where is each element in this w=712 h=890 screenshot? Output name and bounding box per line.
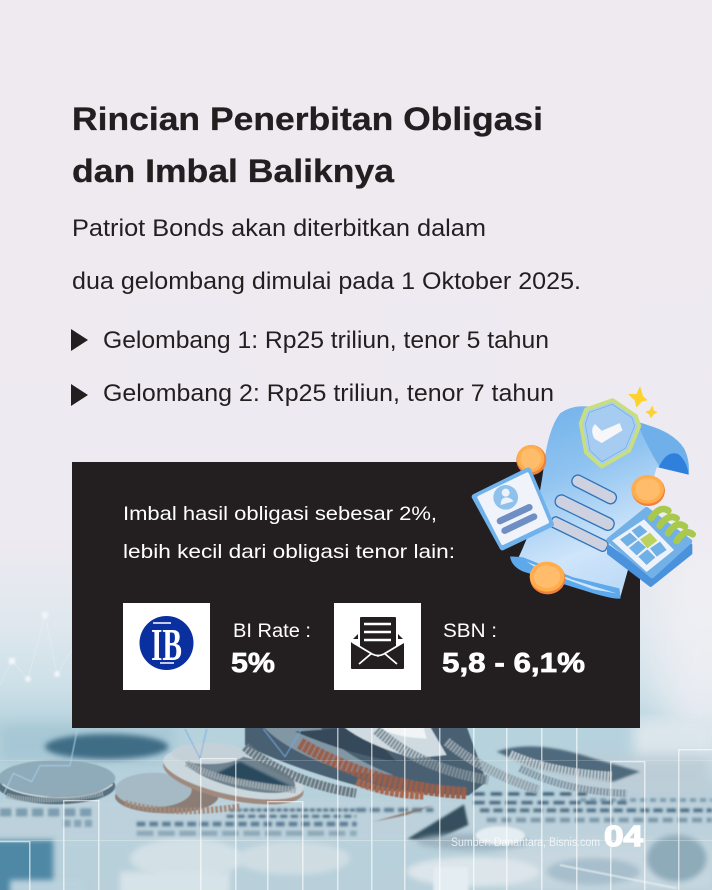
leaning coins xyxy=(245,727,538,796)
SBN value: 5,8 - 6,1% xyxy=(442,647,585,678)
document lines xyxy=(549,473,618,553)
printed figures xyxy=(0,794,712,833)
coin: bottom xyxy=(530,562,565,594)
city details xyxy=(433,867,468,890)
intro paragraph: dua gelombang dimulai pada 1 Oktober 2025. xyxy=(72,268,581,295)
coin: stacked pair xyxy=(162,742,304,805)
panel text: lebih kecil dari obligasi tenor lain: xyxy=(123,541,455,563)
translucent chart bars xyxy=(0,728,712,890)
coin: left flat xyxy=(0,760,115,804)
BI Rate value: BI Rate : xyxy=(233,621,311,642)
BI Rate value xyxy=(231,621,311,678)
sparkles xyxy=(629,387,657,417)
title: dan Imbal Baliknya xyxy=(72,153,394,189)
SBN value: SBN : xyxy=(443,621,497,642)
icon: Bank Indonesia logo xyxy=(123,603,210,690)
coin: top left xyxy=(516,445,546,475)
shield xyxy=(581,400,639,467)
coin: right xyxy=(497,746,640,793)
BI Rate value: 5% xyxy=(231,647,275,678)
panel text xyxy=(123,503,455,563)
tones xyxy=(0,725,173,762)
coin: right xyxy=(631,475,665,506)
reflection xyxy=(407,804,468,841)
intro paragraph xyxy=(72,215,581,295)
coin: second flat xyxy=(115,773,240,813)
faint chart highlights above the photo xyxy=(0,612,72,685)
calendar xyxy=(609,509,693,585)
SBN value xyxy=(442,621,585,678)
source note: Sumber: Danantara, Bisnis.com xyxy=(451,837,600,849)
title: Rincian Penerbitan Obligasi xyxy=(72,101,543,137)
intro paragraph: Patriot Bonds akan diterbitkan dalam xyxy=(72,215,486,242)
panel: yield comparison xyxy=(72,462,640,728)
bullet: gelombang 2: Gelombang 2: Rp25 triliun, tenor 7 tahun xyxy=(103,380,554,407)
icon: open envelope xyxy=(334,603,421,690)
illustration: bond document with shield, coins and calendar xyxy=(474,387,693,599)
icon: Bank Indonesia logo: IB xyxy=(151,619,182,670)
bullet: gelombang 1: Gelombang 1: Rp25 triliun, tenor 5 tahun xyxy=(103,327,549,354)
page number: 04 xyxy=(604,821,643,853)
identity card xyxy=(474,470,551,548)
panel text: Imbal hasil obligasi sebesar 2%, xyxy=(123,503,437,525)
document xyxy=(510,406,689,599)
title xyxy=(72,101,543,189)
background photo: coins and city xyxy=(0,540,712,890)
